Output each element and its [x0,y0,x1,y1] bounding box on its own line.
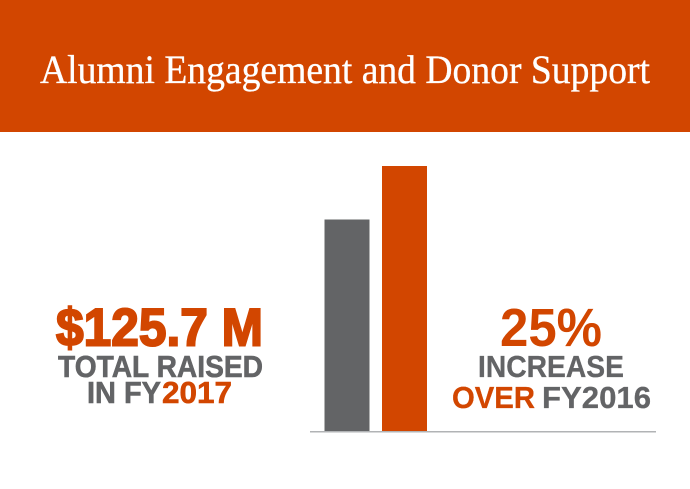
bar chart [310,166,656,432]
bar: FY2017 [382,166,427,432]
stat: total raised [56,298,263,410]
amount: $125.7 M [56,298,263,358]
comparison label: OVER [452,380,535,415]
fiscal year label: IN FY [87,375,161,410]
comparison label [452,380,651,415]
header banner [0,0,690,132]
fiscal year label [87,375,232,410]
stat: increase [452,298,651,415]
bar: FY2016 [324,220,370,432]
increase label: INCREASE [478,349,624,384]
comparison label: FY2016 [542,380,651,415]
total raised label: TOTAL RAISED [58,349,263,384]
percentage: 25% [500,298,602,358]
baseline [310,431,656,432]
title: Alumni Engagement and Donor Support [40,47,650,92]
fiscal year label: 2017 [162,375,232,410]
